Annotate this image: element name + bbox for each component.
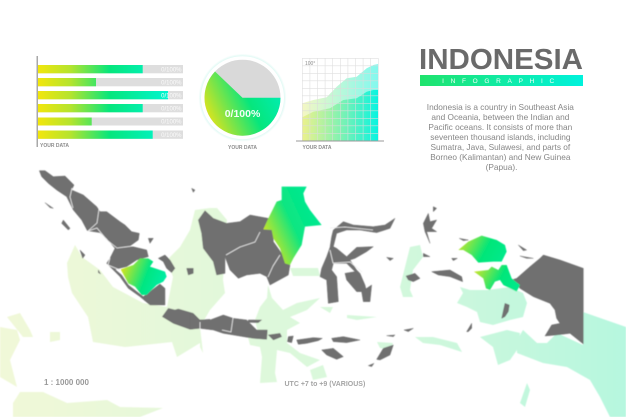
- bar value labels: 0/100%: [161, 106, 182, 112]
- bar value labels: 0/100%: [161, 94, 182, 100]
- description: Borneo (Kalimantan) and New Guinea: [430, 152, 571, 162]
- map of Indonesia: [0, 171, 626, 417]
- description: Pacific oceans. It consists of more than: [428, 122, 573, 132]
- area back series: [302, 64, 378, 141]
- bar value labels: [161, 68, 182, 139]
- description: Sumatra, Java, Sulawesi, and parts of: [430, 142, 571, 152]
- dark provinces: [39, 171, 583, 367]
- subtitle band: INFOGRAPHIC: [442, 78, 561, 85]
- highlighted South Sumatra: [121, 258, 167, 295]
- highlighted West Papua: [458, 236, 520, 292]
- bar value labels: 0/100%: [161, 120, 182, 126]
- highlighted North Kalimantan: [263, 187, 322, 265]
- subtitle band: [420, 75, 583, 86]
- scale label: 1 : 1000 000: [44, 378, 89, 387]
- bar value labels: 0/100%: [161, 80, 182, 86]
- pie base: [204, 60, 280, 136]
- pie halo: [198, 54, 286, 142]
- pale background landmasses: [0, 208, 626, 417]
- area caption: YOUR DATA: [302, 145, 332, 151]
- bar tracks: [38, 65, 183, 139]
- panel: bar chart: [36, 56, 183, 149]
- pie caption: YOUR DATA: [228, 145, 257, 151]
- pie value: 0/100%: [225, 108, 261, 120]
- title: INDONESIA: [419, 44, 583, 76]
- description: (Papua).: [486, 162, 517, 172]
- panel: area chart: [296, 58, 384, 151]
- bar value labels: 0/100%: [161, 133, 182, 139]
- bar value labels: 0/100%: [161, 68, 182, 74]
- Papua and Maluku: [404, 207, 583, 344]
- panel: pie chart: [198, 54, 286, 151]
- pie value slice: [205, 72, 280, 136]
- time zone label: UTC +7 to +9 (VARIOUS): [284, 381, 365, 388]
- bar axis: [36, 56, 38, 147]
- description: seventeen thousand islands, including: [430, 132, 571, 142]
- description: Indonesia is a country in Southeast Asia: [427, 102, 574, 112]
- area baseline: [296, 140, 384, 142]
- description: and Oceania, between the Indian and: [431, 112, 570, 122]
- bar fills: [38, 65, 168, 139]
- Sulawesi: [320, 218, 395, 303]
- bar caption: YOUR DATA: [40, 143, 69, 149]
- Sumatra: [39, 171, 210, 329]
- Java and Lesser Sunda: [190, 313, 395, 367]
- area front series: [302, 90, 378, 141]
- Kalimantan: [190, 211, 395, 367]
- area top label: 100°: [305, 61, 315, 67]
